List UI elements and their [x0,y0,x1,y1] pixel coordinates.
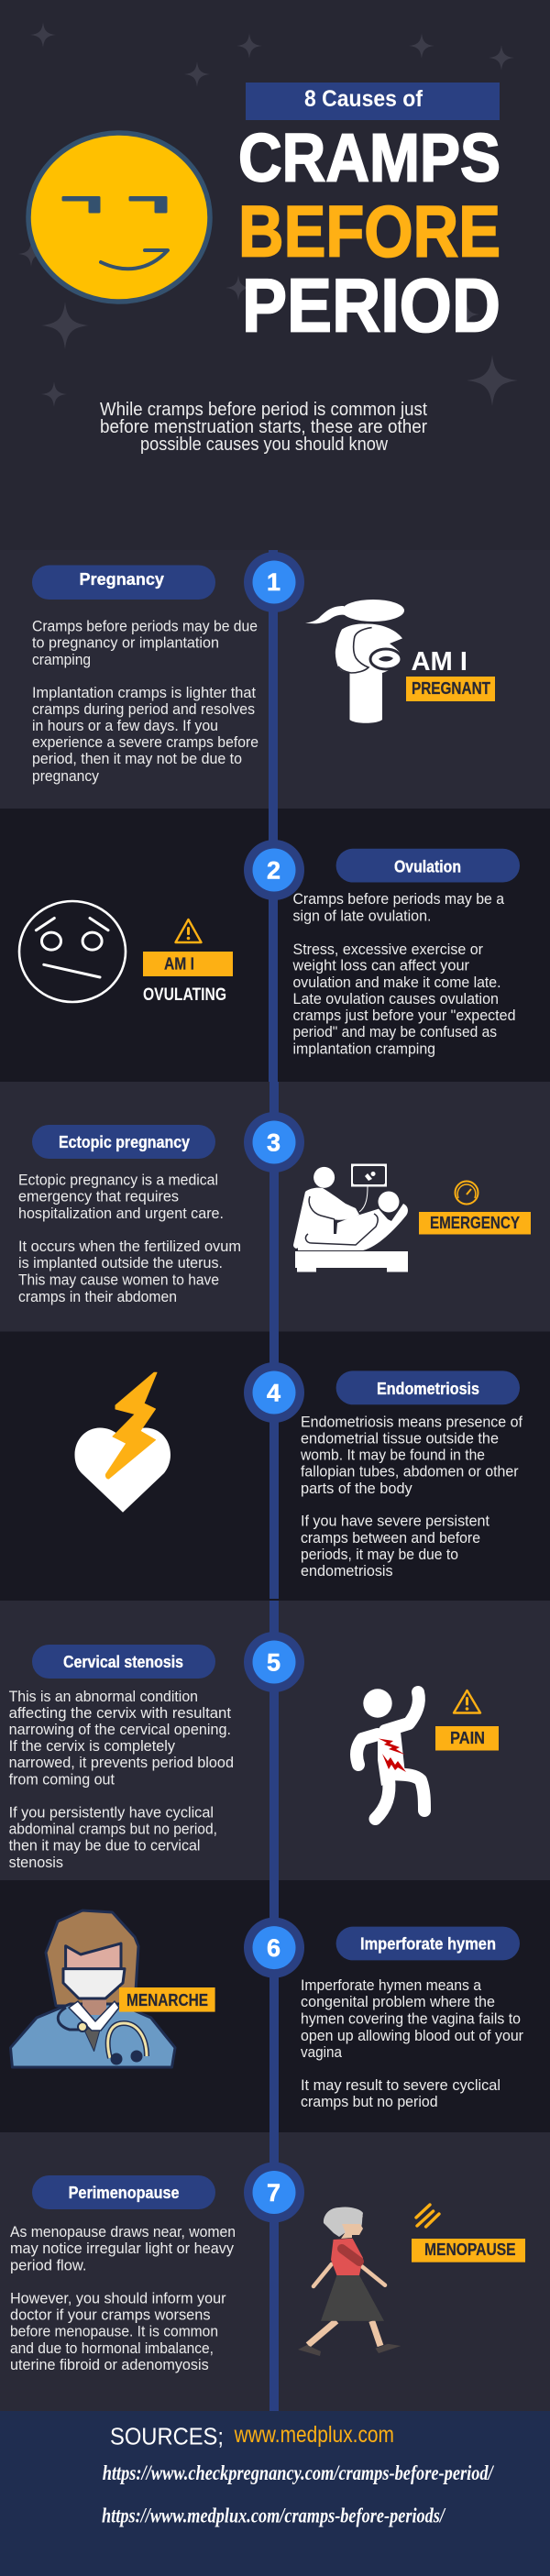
label: am i pregnant: AM I [411,647,468,677]
panel: 1 pregnancy [0,550,550,809]
icon: doctor with mask [11,1910,175,2067]
text block: endometriosis: endometriosis [301,1562,393,1580]
label: am i pregnant: PREGNANT [412,679,490,698]
label: pain [435,1726,499,1751]
text block: cervical stenosis: narrowed, it prevents period blood [9,1754,234,1771]
text block: imperforate hymen: hymen covering the vagina fails to [301,2010,521,2028]
text block: cervical stenosis: If the cervix is completely [9,1737,175,1755]
text block: endometriosis: endometrial tissue outside the [301,1429,499,1447]
icon: figure in pain [357,1689,424,1819]
label: am i ovulating: AM I [164,954,194,973]
step number 5 [244,1632,304,1692]
step number 2 [244,840,304,900]
intro text: before menstruation starts, these are other [100,417,427,437]
text block: imperforate hymen: cramps but no period [301,2093,438,2110]
text block: imperforate hymen: Imperforate hymen means a [301,1976,481,1994]
heading: ovulation [336,849,520,882]
label: menopause [412,2239,525,2262]
step number 4: 4 [267,1379,280,1406]
text block: pregnancy: period, then it may not be due to [32,750,242,767]
text block: perimenopause: before menopause. It is common [10,2323,218,2340]
icon: heart with lightning bolt [75,1372,170,1513]
text block: cervical stenosis: narrowing of the cervical opening. [9,1721,231,1738]
label: menarche [119,1987,215,2012]
text block: imperforate hymen: It may result to severe cyclical [301,2076,500,2094]
text block: perimenopause: However, you should inform your [10,2290,226,2307]
text block: ovulation: Stress, excessive exercise or [293,941,483,958]
text block: ovulation: ovulation and make it come late. [293,974,500,991]
label: pain: PAIN [450,1729,485,1747]
text block: ectopic pregnancy: is implanted outside the uterus. [18,1254,223,1271]
panel: header [0,0,550,550]
intro text [100,400,427,455]
panel: 6 imperforate hymen [0,1880,550,2132]
heading: cervical stenosis: Cervical stenosis [63,1653,183,1671]
text block: endometriosis: cramps between and before [301,1529,480,1547]
subtitle banner: 8 Causes of [304,86,424,112]
text block: perimenopause: As menopause draws near, women [10,2223,236,2240]
step number 4 [244,1362,304,1423]
text block: perimenopause: may notice irregular light or heavy [10,2240,234,2257]
decorative stars [18,22,518,407]
panel: 2 ovulation [0,809,550,1082]
panel: 5 cervical stenosis [0,1601,550,1880]
step number 6: 6 [267,1934,280,1962]
step number 1: 1 [267,568,280,596]
text block: ectopic pregnancy: Ectopic pregnancy is a medical [18,1172,218,1189]
sources heading: SOURCES; [110,2423,224,2450]
text block: ovulation: period" and may be confused as [293,1023,497,1040]
label: am i ovulating: OVULATING [143,985,226,1005]
text block: ovulation [292,890,515,1058]
text block: endometriosis [300,1413,522,1580]
text block: ectopic pregnancy: cramps in their abdomen [18,1288,177,1305]
text block: endometriosis: Endometriosis means presence of [301,1413,522,1430]
text block: cervical stenosis: affecting the cervix with resultant [9,1704,231,1722]
source link 2: https://www.medplux.com/cramps-before-periods/ [102,2504,446,2527]
subtitle banner [246,83,500,120]
heading: endometriosis [336,1371,520,1404]
text block: ovulation: sign of late ovulation. [293,908,431,924]
text block: cervical stenosis: from coming out [9,1771,115,1789]
text block: imperforate hymen: congenital problem where the [301,1993,495,2010]
heading: perimenopause: Perimenopause [69,2184,180,2202]
text block: pregnancy: cramps during period and resolves [32,700,255,718]
step number 1 [244,552,304,612]
heading: ectopic pregnancy: Ectopic pregnancy [59,1133,190,1151]
text block: pregnancy: Implantation cramps is lighter that [32,684,256,701]
heading: endometriosis: Endometriosis [377,1380,479,1398]
label: menarche: MENARCHE [126,1991,208,2009]
text block: perimenopause: and due to hormonal imbalance, [10,2339,214,2357]
text block: pregnancy: cramping [32,651,91,668]
icon: warning triangle [454,1690,480,1712]
text block: pregnancy: Cramps before periods may be due [32,618,258,634]
icon: smirking face [28,133,210,302]
text block: pregnancy: in hours or a few days. If you [32,717,218,734]
heading: pregnancy: Pregnancy [79,570,164,589]
text block: endometriosis: If you have severe persistent [301,1513,490,1530]
step number 3: 3 [267,1129,280,1157]
icon: older woman walking [298,2207,401,2356]
step number 3 [244,1112,304,1172]
heading: imperforate hymen [336,1927,520,1960]
title: BEFORE [238,191,500,271]
icon: hot flash stripes [416,2205,439,2227]
label: emergency: EMERGENCY [430,1214,520,1232]
step number 6 [244,1918,304,1978]
text block: ovulation: weight loss can affect your [292,957,469,974]
text block: cervical stenosis: then it may be due to cervical [9,1837,200,1855]
label: am i pregnant [406,647,495,701]
text block: perimenopause: period flow. [10,2257,86,2274]
text block: pregnancy: to pregnancy or implantation [32,634,219,652]
title [238,119,500,348]
label: menopause: MENOPAUSE [424,2240,516,2259]
icon: worried face [19,901,126,1002]
text block: imperforate hymen: vagina [301,2043,342,2061]
panel: sources footer [0,2411,550,2576]
text block: cervical stenosis: stenosis [9,1854,63,1871]
text block: endometriosis: periods, it may be due to [301,1546,458,1563]
text block: perimenopause [10,2223,236,2373]
text block: pregnancy: experience a severe cramps before [32,733,258,751]
intro text: While cramps before period is common just [100,400,427,420]
icon: ultrasound scan [293,1164,408,1272]
panel: 4 endometriosis [0,1331,550,1601]
text block: ectopic pregnancy: It occurs when the fertilized ovum [18,1238,241,1255]
heading: ectopic pregnancy [32,1125,215,1159]
step number 7 [244,2162,304,2222]
text block: endometriosis: fallopian tubes, abdomen or other [301,1463,519,1481]
text block: imperforate hymen [301,1976,523,2110]
text block: cervical stenosis: abdominal cramps but no period, [9,1821,217,1838]
text block: endometriosis: parts of the body [301,1480,412,1497]
panel: 7 perimenopause [0,2132,550,2411]
text block: ovulation: implantation cramping [293,1040,435,1058]
label: am i ovulating [143,952,233,1005]
heading: perimenopause [32,2175,215,2209]
title: CRAMPS [238,119,500,196]
text block: imperforate hymen: open up allowing blood out of your [301,2027,523,2044]
heading: cervical stenosis [32,1645,215,1679]
intro text: possible causes you should know [140,435,388,455]
source site: www.medplux.com [234,2422,394,2448]
text block: ovulation: Late ovulation causes ovulation [293,990,499,1007]
title: PERIOD [242,262,500,348]
text block: perimenopause: doctor if your cramps worsens [10,2306,211,2324]
text block: ovulation: Cramps before periods may be a [293,890,505,908]
text block: ectopic pregnancy [18,1172,241,1305]
heading: pregnancy [32,565,215,600]
text block: ectopic pregnancy: This may cause women to have [18,1271,219,1288]
step number 7: 7 [267,2179,280,2207]
text block: pregnancy: pregnancy [32,767,99,785]
text block: pregnancy [32,618,258,785]
text block: ectopic pregnancy: hospitalization and urgent care. [18,1205,224,1222]
step number 5: 5 [267,1648,280,1676]
text block: endometriosis: womb. It may be found in the [300,1447,485,1463]
icon: gauge [455,1181,478,1205]
panel: 3 ectopic pregnancy [0,1082,550,1331]
heading: ovulation: Ovulation [394,858,461,876]
text block: perimenopause: uterine fibroid or adenomyosis [10,2356,209,2373]
text block: cervical stenosis [9,1688,234,1871]
step number 2: 2 [267,856,280,884]
text block: cervical stenosis: This is an abnormal condition [9,1688,198,1705]
text block: ovulation: cramps just before your "expected [293,1007,515,1024]
text block: cervical stenosis: If you persistently have cyclical [9,1804,214,1822]
icon: pregnant woman [305,600,404,723]
heading: imperforate hymen: Imperforate hymen [360,1934,496,1953]
text block: ectopic pregnancy: emergency that requires [18,1188,179,1205]
icon: warning triangle [176,919,202,942]
